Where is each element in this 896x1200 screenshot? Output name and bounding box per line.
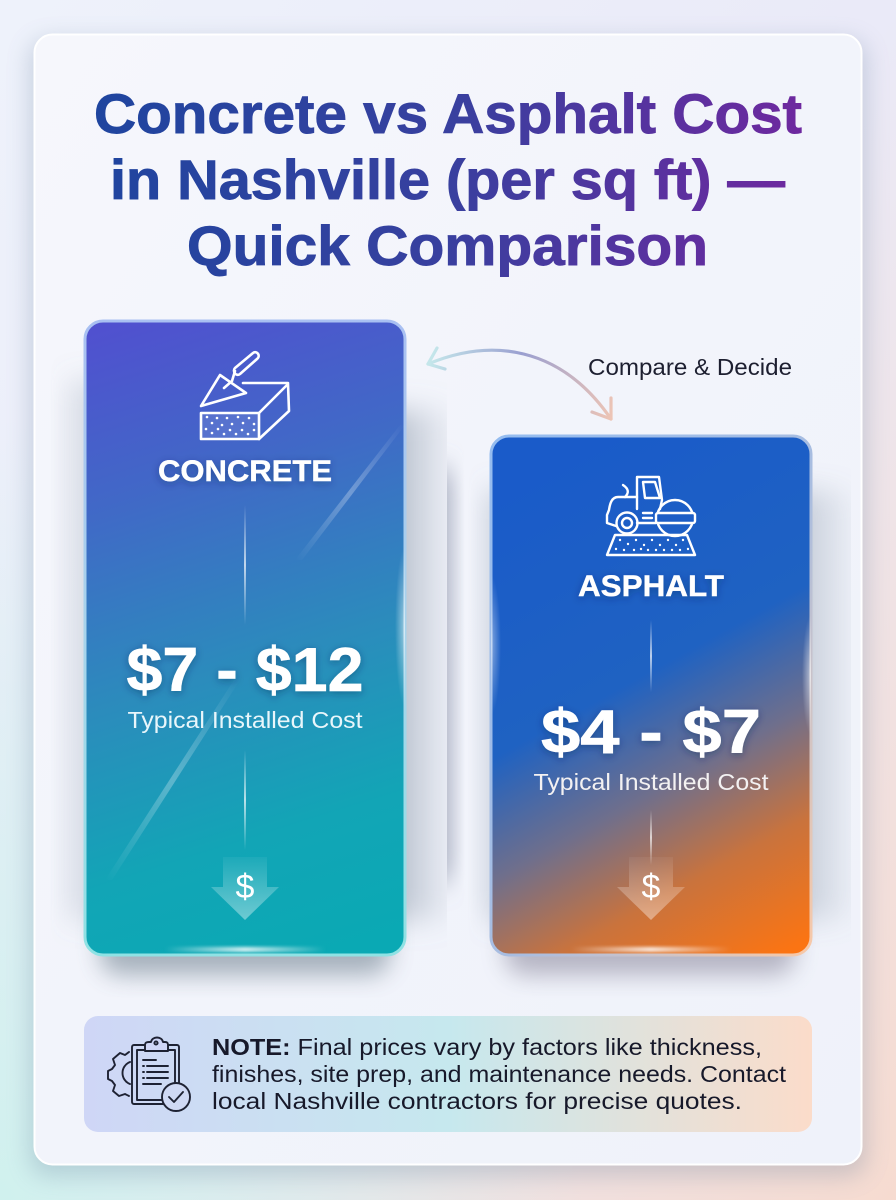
icon: clipboard, gear, check (108, 1038, 190, 1111)
icon: road roller (607, 477, 695, 555)
compare label: Compare & Decide (588, 354, 792, 380)
note text: NOTE: Final prices vary by factors like thickness, (212, 1034, 762, 1060)
note text (212, 1034, 787, 1114)
divider lower (244, 750, 246, 850)
compare arrow (428, 348, 611, 419)
title (94, 82, 802, 277)
icon: dollar down arrow asphalt: $ (642, 868, 661, 906)
note text: finishes, site prep, and maintenance needs. Contact (212, 1061, 787, 1087)
icon: dollar down arrow asphalt (617, 857, 685, 920)
concrete caption: Typical Installed Cost (128, 707, 363, 733)
panel: concrete (85, 321, 415, 955)
card shadows (50, 380, 851, 975)
note text: local Nashville contractors for precise quotes. (212, 1088, 742, 1114)
icon: trowel and concrete block (201, 352, 289, 439)
asphalt divider upper (650, 620, 652, 692)
asphalt caption: Typical Installed Cost (534, 769, 769, 795)
title: in Nashville (per sq ft) — (110, 148, 785, 211)
note box (84, 1016, 812, 1132)
asphalt price: $4 - $7 (541, 698, 761, 767)
concrete heading: CONCRETE (158, 455, 332, 488)
title: Quick Comparison (187, 214, 708, 277)
asphalt divider lower (650, 810, 652, 865)
panel: asphalt (481, 436, 820, 955)
icon: dollar down arrow (211, 857, 279, 920)
icon: dollar down arrow: $ (236, 868, 255, 906)
concrete price: $7 - $12 (126, 636, 364, 705)
asphalt heading: ASPHALT (578, 570, 724, 603)
divider upper (244, 505, 246, 625)
title: Concrete vs Asphalt Cost (94, 82, 802, 145)
